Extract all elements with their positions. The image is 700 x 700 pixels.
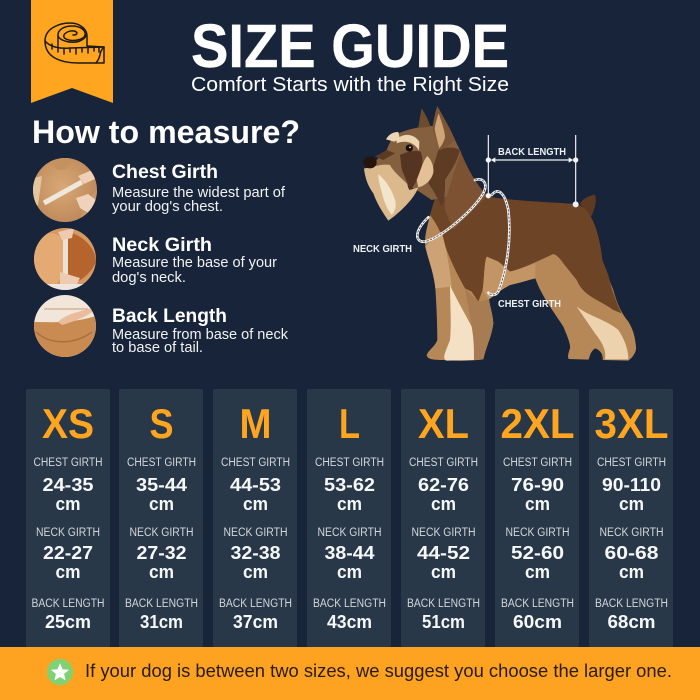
- size column S: NECK GIRTH: [130, 527, 194, 539]
- size column XL: CHEST GIRTH: [409, 457, 478, 469]
- size column 3XL: 60-68: [604, 542, 658, 563]
- size column XS: cm: [56, 561, 80, 582]
- left ear: [418, 108, 431, 128]
- size column S: 31cm: [140, 611, 183, 632]
- photo: neck girth: [34, 228, 96, 290]
- size column XS: [26, 389, 110, 647]
- tail: [580, 195, 596, 217]
- subtitle: Comfort Starts with the Right Size: [191, 74, 509, 96]
- eye: [406, 144, 413, 152]
- cheek: [417, 156, 433, 187]
- chest girth chain: [488, 191, 509, 295]
- size column XS: BACK LENGTH: [32, 598, 104, 610]
- description: chest girth: Measure the widest part of: [112, 185, 286, 201]
- panel: neck girth: dog's neck.: [112, 270, 186, 286]
- hind leg cream: [577, 307, 628, 359]
- heading: chest girth: Chest Girth: [112, 162, 218, 183]
- size column 3XL: NECK GIRTH: [600, 527, 664, 539]
- title: SIZE GUIDE: [191, 12, 509, 80]
- belly tan: [483, 257, 535, 299]
- size column S: CHEST GIRTH: [127, 457, 196, 469]
- size column XS: 22-27: [43, 542, 93, 563]
- heading: how to measure: How to measure?: [32, 114, 300, 150]
- size column S: S: [150, 400, 174, 447]
- size column L: CHEST GIRTH: [315, 457, 384, 469]
- neck girth chain: [417, 179, 509, 295]
- icon: green star badge: [47, 659, 73, 685]
- size column L: cm: [337, 561, 362, 582]
- size column XL: 62-76: [418, 474, 469, 495]
- size column XL: cm: [431, 493, 456, 514]
- size column XS: XS: [42, 400, 94, 447]
- size column 2XL: 52-60: [511, 542, 564, 563]
- panel: back length: [34, 295, 289, 357]
- size column 3XL: CHEST GIRTH: [597, 457, 666, 469]
- size column 2XL: 76-90: [511, 474, 564, 495]
- size column S: 27-32: [136, 542, 186, 563]
- size column XL: [401, 389, 485, 647]
- size column S: cm: [149, 561, 174, 582]
- size column L: NECK GIRTH: [318, 527, 382, 539]
- front leg shaded side: [465, 288, 493, 360]
- chest tan: [425, 232, 452, 288]
- right ear: [433, 106, 455, 150]
- description: neck girth: Measure the base of your: [112, 255, 277, 271]
- size column XL: 51cm: [422, 611, 465, 632]
- size column L: 38-44: [324, 542, 375, 563]
- size column L: 53-62: [324, 474, 375, 495]
- panel: back length: to base of tail.: [112, 340, 203, 356]
- size column XL: BACK LENGTH: [407, 598, 480, 610]
- size column M: 32-38: [230, 542, 280, 563]
- size column 3XL: 3XL: [594, 400, 668, 447]
- size column XL: XL: [418, 400, 469, 447]
- size column M: [213, 389, 297, 647]
- heading: back length: Back Length: [112, 306, 227, 327]
- brows: [386, 132, 419, 151]
- size column 2XL: BACK LENGTH: [501, 598, 574, 610]
- dark neck band: [428, 147, 460, 207]
- size column M: M: [240, 400, 272, 447]
- size column XS: CHEST GIRTH: [34, 457, 102, 469]
- size column 2XL: cm: [525, 493, 550, 514]
- photo: chest girth: [33, 158, 97, 222]
- photo: back length: [34, 295, 96, 357]
- size column XL: cm: [431, 561, 456, 582]
- nose: [363, 156, 377, 168]
- size column M: 37cm: [233, 611, 278, 632]
- dark face mask: [400, 151, 422, 191]
- beard: [364, 165, 418, 221]
- footer banner: [0, 647, 700, 700]
- size column L: cm: [337, 493, 362, 514]
- size column L: [307, 389, 391, 647]
- size column 2XL: NECK GIRTH: [506, 527, 570, 539]
- size column 2XL: CHEST GIRTH: [503, 457, 572, 469]
- size column 2XL: 2XL: [500, 400, 574, 447]
- size column L: L: [339, 400, 360, 447]
- head: [370, 126, 461, 200]
- size column XS: NECK GIRTH: [36, 527, 100, 539]
- size column 3XL: BACK LENGTH: [595, 598, 668, 610]
- size column 3XL: [589, 389, 673, 647]
- description: back length: Measure from base of neck: [112, 327, 289, 343]
- panel: chest girth: your dog's chest.: [112, 199, 223, 215]
- heading: neck girth: Neck Girth: [112, 235, 212, 256]
- size column S: cm: [149, 493, 174, 514]
- panel: neck girth: [34, 228, 277, 290]
- label: chest girth: CHEST GIRTH: [498, 298, 561, 310]
- size column XS: 25cm: [45, 611, 91, 632]
- label: back length: BACK LENGTH: [498, 146, 566, 158]
- size column S: 35-44: [136, 474, 188, 495]
- dog illustration: [363, 106, 636, 361]
- tan body base: [425, 200, 636, 361]
- size column L: 43cm: [327, 611, 372, 632]
- beard highlight: [378, 174, 396, 215]
- size column M: NECK GIRTH: [224, 527, 288, 539]
- size column M: cm: [243, 561, 268, 582]
- size column 3XL: cm: [619, 561, 644, 582]
- footer note: If your dog is between two sizes, we suggest you choose the larger one.: [85, 660, 672, 681]
- front leg cream: [444, 285, 474, 361]
- size column XS: cm: [56, 493, 80, 514]
- size column 3XL: 68cm: [608, 611, 656, 632]
- right ear inner: [435, 113, 445, 148]
- back length measure lines: [486, 135, 579, 207]
- panel: chest girth: [33, 158, 286, 222]
- size column S: BACK LENGTH: [125, 598, 198, 610]
- size column XL: 44-52: [417, 542, 470, 563]
- lighter neck side: [445, 150, 487, 230]
- size column 3XL: cm: [619, 493, 644, 514]
- icon: tape measure: [45, 23, 104, 63]
- size column M: BACK LENGTH: [219, 598, 292, 610]
- size column S: [119, 389, 203, 647]
- size column 2XL: 60cm: [513, 611, 562, 632]
- size column L: BACK LENGTH: [313, 598, 386, 610]
- muzzle top: [375, 150, 395, 160]
- label: neck girth: NECK GIRTH: [353, 243, 412, 255]
- size column XS: 24-35: [42, 474, 94, 495]
- size column M: CHEST GIRTH: [221, 457, 290, 469]
- dark saddle and neck: [430, 148, 622, 313]
- size column M: 44-53: [230, 474, 281, 495]
- size column XL: NECK GIRTH: [412, 527, 476, 539]
- ribbon with tape measure icon: [31, 0, 113, 103]
- size column 3XL: 90-110: [602, 474, 661, 495]
- size column 2XL: cm: [525, 561, 550, 582]
- size column 2XL: [495, 389, 579, 647]
- size column M: cm: [243, 493, 268, 514]
